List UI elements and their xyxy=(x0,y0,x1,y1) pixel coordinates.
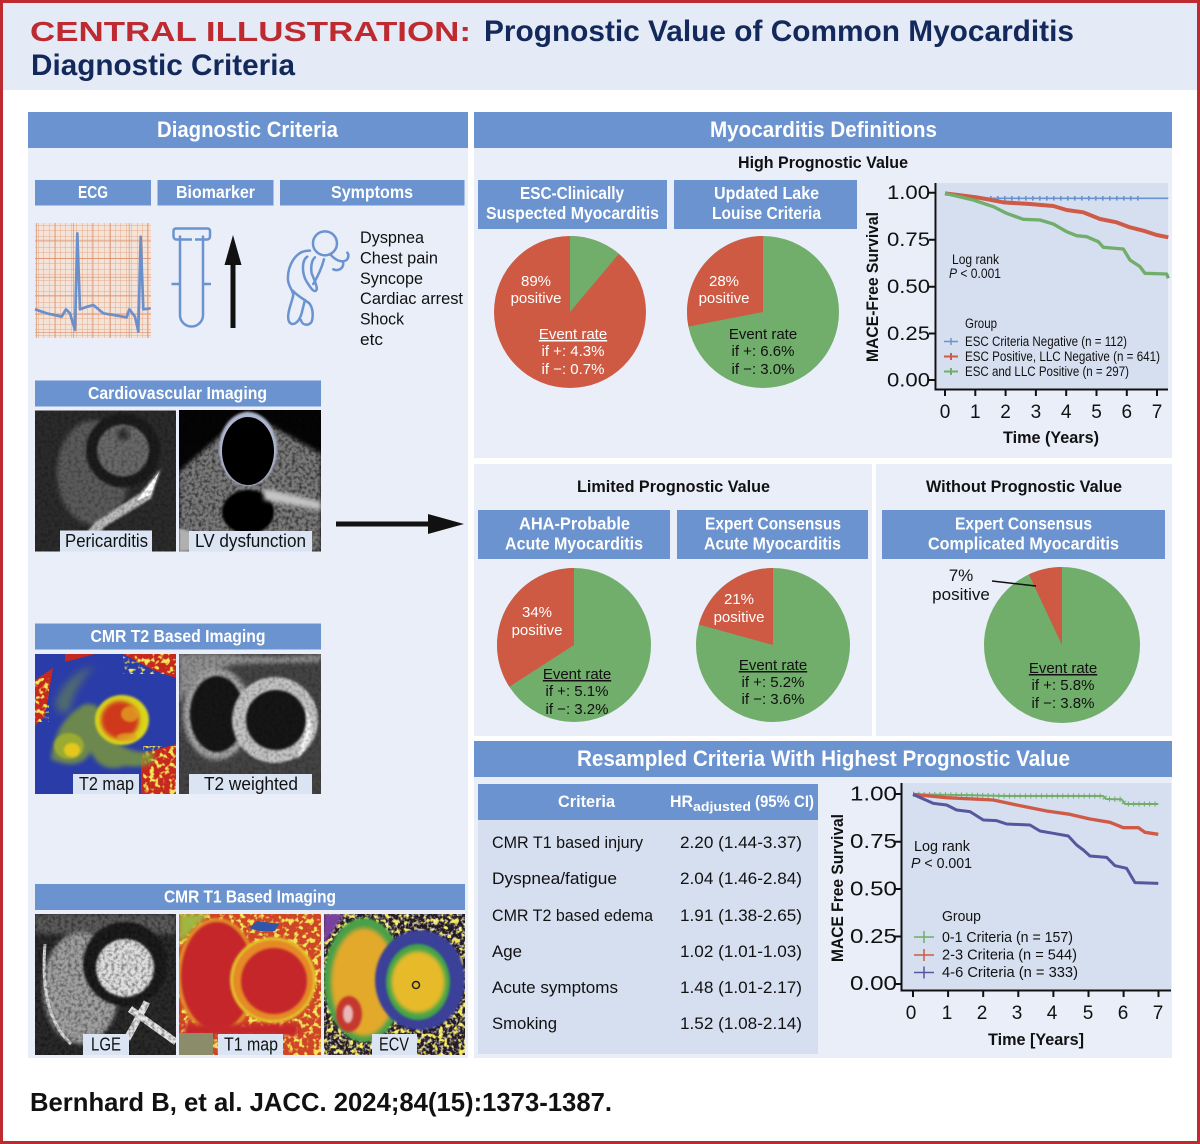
image: pericarditis xyxy=(35,410,176,552)
sub-heading: symptoms: Symptoms xyxy=(331,182,413,202)
sub-heading: CMR T1 based imaging: CMR T1 Based Imaging xyxy=(164,886,336,906)
pie: LLC 28% positive: positive xyxy=(699,290,749,307)
sub-heading: biomarker xyxy=(158,180,274,206)
x tick labels: 5 xyxy=(1083,1003,1093,1024)
y tick labels: 0.25 xyxy=(887,324,930,345)
legend: ESC and LLC Positive (n = 297) xyxy=(965,364,1129,379)
label: T2 map: T2 map xyxy=(79,774,134,794)
sub-heading: expert consensus complicated xyxy=(882,510,1165,559)
heading: resampled criteria: Resampled Criteria With Highest Prognostic Value xyxy=(577,746,1070,771)
sub-heading: ESC clinically suspected: ESC-Clinically xyxy=(520,183,624,203)
heading: limited prognostic value: Limited Prognostic Value xyxy=(577,477,770,496)
label: T2 weighted: T2 weighted xyxy=(204,774,298,794)
survival curves xyxy=(913,794,1158,883)
table rows: Dyspnea/fatigue xyxy=(492,869,617,888)
icon: ECG trace xyxy=(35,223,151,338)
table rows: 1.02 (1.01-1.03) xyxy=(680,942,802,961)
legend xyxy=(944,316,1160,379)
sub-heading: AHA probable: Acute Myocarditis xyxy=(505,534,643,554)
heading: diagnostic criteria: Diagnostic Criteria xyxy=(157,117,339,142)
x tick labels xyxy=(940,402,1162,423)
sub-heading: expert consensus complicated: Complicated Myocarditis xyxy=(928,534,1119,554)
table: hazard ratios xyxy=(478,784,818,1054)
x tick labels: 6 xyxy=(1118,1003,1128,1024)
table rows: 2.20 (1.44-3.37) xyxy=(680,833,802,852)
pie: AHA 34% positive xyxy=(497,568,651,722)
y tick labels xyxy=(850,784,897,995)
pie: AHA 34% positive: if +: 5.1% xyxy=(546,683,608,700)
sub-heading: expert consensus acute xyxy=(677,510,868,559)
symptoms list xyxy=(360,228,463,349)
axes and ticks xyxy=(894,783,1171,997)
icon: hunched person xyxy=(288,231,348,325)
label: ECV: ECV xyxy=(379,1034,409,1054)
table rows: 1.48 (1.01-2.17) xyxy=(680,978,802,997)
pie: AHA 34% positive: positive xyxy=(512,622,562,639)
y tick labels: 1.00 xyxy=(887,183,930,204)
title: first line: Prognostic Value of Common Myocarditis xyxy=(484,15,1074,48)
sub-heading: cardiovascular imaging: Cardiovascular Imaging xyxy=(88,383,267,403)
panel: without prognostic value xyxy=(876,464,1172,736)
panel: resampled criteria xyxy=(474,741,1172,1058)
table rows xyxy=(492,833,802,1033)
title band xyxy=(0,0,1200,90)
sub-heading: updated lake louise xyxy=(674,180,857,229)
sub-heading: expert consensus complicated: Expert Consensus xyxy=(955,514,1092,534)
sub-heading: updated lake louise: Louise Criteria xyxy=(712,203,821,223)
panel: limited prognostic value xyxy=(474,464,872,736)
pie: ESC 89% positive: 89% xyxy=(521,273,551,290)
symptoms list: Shock xyxy=(360,310,404,328)
y tick labels: 0.50 xyxy=(887,277,930,298)
pie: AHA 34% positive: Event rate xyxy=(543,666,611,683)
label: LGE: LGE xyxy=(91,1034,121,1054)
sub-heading: expert consensus acute: Acute Myocarditis xyxy=(704,534,841,554)
heading: myocarditis definitions: Myocarditis Definitions xyxy=(710,117,937,142)
pie: LLC 28% positive xyxy=(687,236,839,388)
title: second line: Diagnostic Criteria xyxy=(31,49,295,82)
title: central illustration tag: CENTRAL ILLUSTRATION: xyxy=(30,16,471,47)
table rows: CMR T2 based edema xyxy=(492,906,654,925)
sub-heading: expert consensus acute: Expert Consensus xyxy=(705,514,841,534)
symptoms list: Dyspnea xyxy=(360,228,425,247)
pie: expert acute 21% positive: Event rate xyxy=(739,657,807,674)
heading: diagnostic criteria xyxy=(28,112,468,148)
legend: ESC Criteria Negative (n = 112) xyxy=(965,334,1127,349)
symptoms list: etc xyxy=(360,330,383,349)
sub-heading: ECG: ECG xyxy=(78,182,108,202)
pie: ESC 89% positive: Event rate xyxy=(539,326,607,343)
chart: survival by number of criteria xyxy=(828,783,1171,1049)
legend: Group xyxy=(942,909,981,925)
pie: AHA 34% positive: if −: 3.2% xyxy=(546,701,608,718)
sub-heading: AHA probable xyxy=(478,510,670,559)
icon: up arrow xyxy=(224,235,242,328)
y tick labels: 0.00 xyxy=(887,370,930,392)
sub-heading: ESC clinically suspected xyxy=(478,180,667,229)
icon: test tube xyxy=(172,228,211,326)
y tick labels xyxy=(887,183,930,392)
table rows: Acute symptoms xyxy=(492,978,618,997)
citation: Bernhard B, et al. JACC. 2024;84(15):1373-1387. xyxy=(30,1087,612,1117)
pie: expert acute 21% positive xyxy=(696,568,850,722)
x axis title: Time (Years) xyxy=(1003,428,1099,447)
sub-heading: ESC clinically suspected: Suspected Myocarditis xyxy=(486,203,659,223)
log rank annotation: P < 0.001 xyxy=(911,856,972,872)
legend: ESC Positive, LLC Negative (n = 641) xyxy=(965,349,1160,364)
x tick labels: 4 xyxy=(1047,1003,1058,1024)
log rank annotation: P < 0.001 xyxy=(949,266,1001,281)
table rows: CMR T1 based injury xyxy=(492,833,643,852)
pie: expert complicated 7% positive: Event rate xyxy=(1029,660,1097,677)
pie: expert complicated 7% positive: if −: 3.8% xyxy=(1032,695,1094,712)
sub-heading: CMR T2 based imaging xyxy=(35,624,321,650)
pie: ESC 89% positive: if +: 4.3% xyxy=(542,343,604,360)
log rank annotation: Log rank xyxy=(914,839,971,855)
symptoms list: Syncope xyxy=(360,269,423,288)
symptoms list: Chest pain xyxy=(360,248,438,268)
pie: expert complicated 7% positive: 7% xyxy=(949,566,973,585)
legend: 4-6 Criteria (n = 333) xyxy=(942,965,1078,981)
x tick labels: 2 xyxy=(1000,402,1011,423)
table rows: 1.52 (1.08-2.14) xyxy=(680,1014,802,1033)
heading: myocarditis definitions xyxy=(474,112,1172,148)
label: LV dysfunction: LV dysfunction xyxy=(195,531,306,551)
pie: LLC 28% positive: if +: 6.6% xyxy=(732,343,794,360)
table header: (95% CI) xyxy=(755,792,814,811)
image: LV dysfunction echo xyxy=(179,410,321,552)
log rank annotation xyxy=(911,839,972,872)
x tick labels: 1 xyxy=(942,1003,952,1024)
sub-heading: symptoms xyxy=(280,180,464,206)
sub-heading: CMR T2 based imaging: CMR T2 Based Imaging xyxy=(90,626,266,646)
pie: expert complicated 7% positive: positive xyxy=(932,585,990,604)
x tick labels: 7 xyxy=(1152,402,1162,423)
y axis title: MACE Free Survival xyxy=(828,814,847,962)
x tick labels: 7 xyxy=(1153,1003,1163,1024)
table rows: Smoking xyxy=(492,1014,557,1033)
table rows: Age xyxy=(492,942,522,961)
y axis title: MACE-Free Survival xyxy=(863,212,882,362)
image: T2 map xyxy=(35,654,176,794)
symptoms list: Cardiac arrest xyxy=(360,289,463,308)
sub-heading: AHA probable: AHA-Probable xyxy=(519,514,630,534)
image: T2 weighted xyxy=(179,654,321,794)
pie: expert complicated 7% positive xyxy=(932,566,1140,723)
panel: high prognostic value definitions xyxy=(474,112,1172,458)
label: T1 map: T1 map xyxy=(224,1034,278,1054)
pie: ESC 89% positive: if −: 0.7% xyxy=(542,361,604,378)
pie: AHA 34% positive: 34% xyxy=(522,604,552,621)
table header: Criteria xyxy=(558,792,616,811)
panel: diagnostic criteria xyxy=(28,112,468,1058)
table header: HR xyxy=(670,792,693,811)
image: T1 map xyxy=(177,914,321,1055)
label: pericarditis: Pericarditis xyxy=(65,531,148,551)
x tick labels: 3 xyxy=(1031,402,1041,423)
table rows: 2.04 (1.46-2.84) xyxy=(680,869,802,888)
arrow: to definitions xyxy=(336,514,464,534)
pie: ESC 89% positive xyxy=(494,236,646,388)
image: LGE xyxy=(35,914,176,1055)
y tick labels: 1.00 xyxy=(850,784,897,806)
pie: ESC 89% positive: positive xyxy=(511,290,561,307)
pie: expert complicated 7% positive: if +: 5.8% xyxy=(1032,677,1094,694)
sub-heading: biomarker: Biomarker xyxy=(176,182,255,202)
chart: survival by ESC and LLC xyxy=(863,183,1168,447)
sub-heading: updated lake louise: Updated Lake xyxy=(714,183,819,203)
x tick labels: 5 xyxy=(1091,402,1102,423)
pie: expert acute 21% positive: if −: 3.6% xyxy=(742,691,804,708)
sub-heading: ECG xyxy=(35,180,151,206)
legend xyxy=(914,909,1078,981)
pie: expert acute 21% positive: positive xyxy=(714,609,764,626)
x tick labels xyxy=(906,1003,1163,1024)
legend: 2-3 Criteria (n = 544) xyxy=(942,948,1077,964)
pie: LLC 28% positive: if −: 3.0% xyxy=(732,361,794,378)
table rows: 1.91 (1.38-2.65) xyxy=(680,906,802,925)
x tick labels: 0 xyxy=(906,1003,916,1024)
survival curves xyxy=(945,193,1168,278)
y tick labels: 0.75 xyxy=(850,831,897,853)
pie: LLC 28% positive: Event rate xyxy=(729,326,797,343)
pie: expert acute 21% positive: 21% xyxy=(724,591,754,608)
image: ECV xyxy=(324,914,465,1055)
heading: high prognostic value: High Prognostic Value xyxy=(738,153,908,172)
table header xyxy=(478,784,818,820)
x tick labels: 0 xyxy=(940,402,950,423)
x tick labels: 2 xyxy=(977,1003,987,1024)
sub-heading: cardiovascular imaging xyxy=(35,380,321,406)
y tick labels: 0.25 xyxy=(850,926,897,948)
x axis title: Time [Years] xyxy=(988,1030,1084,1049)
x tick labels: 6 xyxy=(1122,402,1132,423)
y tick labels: 0.00 xyxy=(850,973,897,995)
x tick labels: 3 xyxy=(1012,1003,1022,1024)
heading: resampled criteria xyxy=(474,741,1172,777)
y tick labels: 0.75 xyxy=(887,230,930,251)
y tick labels: 0.50 xyxy=(850,878,897,900)
legend: 0-1 Criteria (n = 157) xyxy=(942,930,1073,946)
table header: adjusted xyxy=(693,800,751,814)
heading: without prognostic value: Without Prognostic Value xyxy=(926,477,1122,496)
x tick labels: 4 xyxy=(1061,402,1072,423)
x tick labels: 1 xyxy=(970,402,981,423)
log rank annotation: Log rank xyxy=(952,252,999,267)
legend: Group xyxy=(965,316,997,331)
pie: LLC 28% positive: 28% xyxy=(709,273,739,290)
log rank annotation xyxy=(949,252,1001,281)
pie: expert acute 21% positive: if +: 5.2% xyxy=(742,674,804,691)
sub-heading: CMR T1 based imaging xyxy=(35,884,465,910)
axes and ticks xyxy=(929,183,1168,396)
